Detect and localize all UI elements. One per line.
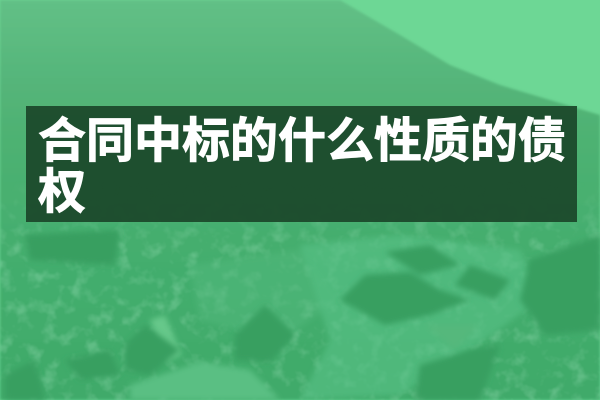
title: 权 bbox=[38, 166, 86, 219]
title: 合同中标的什么性质的债 bbox=[38, 115, 566, 168]
title banner bbox=[26, 106, 577, 222]
title bbox=[38, 115, 566, 219]
